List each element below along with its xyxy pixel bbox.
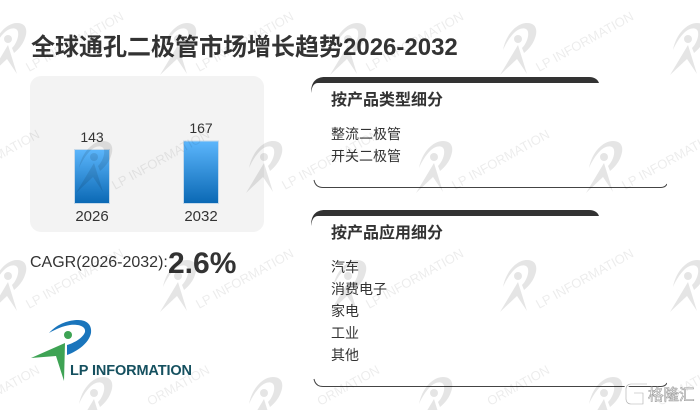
- bar: 2026: [74, 129, 110, 225]
- item: 汽车: [331, 259, 359, 275]
- watermark layer: LP INFORMATION: [109, 127, 212, 193]
- watermark layer: LP INFORMATION: [363, 246, 466, 312]
- item: 整流二极管: [331, 126, 401, 142]
- bar: 2032: 2032: [184, 208, 218, 225]
- item: 家电: [331, 303, 359, 319]
- watermark layer: LP INFORMATION: [533, 246, 636, 312]
- item: 开关二极管: [331, 148, 401, 164]
- watermark layer: ORMATION: [484, 362, 552, 409]
- bar: 2032: 167: [189, 120, 213, 136]
- watermark layer: LP INFORMATION: [23, 246, 126, 312]
- bar: 2032: [184, 120, 218, 225]
- watermark layer: LP INFORMATION: [23, 9, 126, 75]
- bar: 2026: 2026: [75, 208, 109, 225]
- watermark layer: ORMATION: [314, 362, 382, 409]
- logo: LP Information: LP INFORMATION: [70, 363, 192, 379]
- item: 消费电子: [331, 281, 387, 297]
- watermark layer: LP INFORMATION: [449, 127, 552, 193]
- item: 工业: [331, 325, 359, 341]
- panel: bar chart: [30, 76, 264, 232]
- bar: 2026: 143: [80, 129, 104, 145]
- watermark layer: LP INFORMATION: [193, 246, 296, 312]
- CAGR value: 2.6%: [168, 247, 236, 280]
- title: 全球通孔二极管市场增长趋势2026-2032: [31, 34, 458, 61]
- corner brand mark: 格隆汇: 格隆汇: [648, 383, 695, 405]
- heading: applications: 按产品应用细分: [331, 225, 443, 242]
- watermark layer: LP INFORMATION: [363, 9, 466, 75]
- watermark layer: LP INFORMATION: [193, 9, 296, 75]
- panel: applications: [311, 210, 667, 387]
- item: 其他: [331, 347, 359, 363]
- panel: product types: [311, 77, 667, 188]
- watermark layer: LP INFORMATION: [279, 127, 382, 193]
- corner brand mark: 格隆汇: [624, 383, 695, 405]
- heading: product types: 按产品类型细分: [331, 92, 443, 109]
- watermark layer: LP INFORMATION: [533, 9, 636, 75]
- logo: LP Information: [31, 320, 192, 381]
- CAGR label: CAGR(2026-2032):: [30, 254, 168, 271]
- watermark layer: ORMATION: [144, 362, 212, 409]
